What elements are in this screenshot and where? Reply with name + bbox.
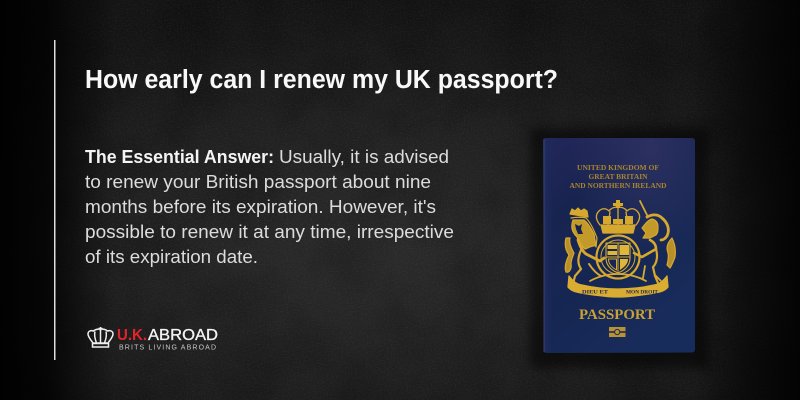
logo: U.K. Abroad	[88, 327, 218, 352]
passport cover	[543, 138, 695, 353]
lion	[565, 208, 604, 284]
motto text	[582, 290, 659, 296]
shield and garter	[596, 236, 640, 278]
crown	[596, 200, 640, 233]
passport heading	[570, 164, 666, 190]
vertical accent line	[54, 40, 56, 360]
passport heading: GREAT BRITAIN	[588, 173, 648, 181]
body text: essential answer: months before its expiration. However, it's	[85, 197, 436, 217]
passport heading: UNITED KINGDOM OF	[577, 164, 659, 172]
logo: U.K. Abroad: ABROAD	[148, 327, 218, 344]
icon: royal coat of arms	[565, 200, 675, 297]
body text: essential answer: Usually, it is advised	[279, 147, 449, 167]
body text: essential answer: The Essential Answer:	[85, 147, 274, 167]
logo: U.K. Abroad: BRITS LIVING ABROAD	[119, 344, 216, 352]
body text: essential answer	[85, 147, 454, 267]
body text: essential answer: of its expiration date.	[85, 247, 258, 267]
passport	[543, 138, 695, 353]
motto text: DIEU ET	[582, 290, 609, 296]
motto text: MON DROIT	[626, 290, 659, 296]
passport heading: AND NORTHERN IRELAND	[570, 182, 666, 190]
logo: U.K. Abroad: U.K.	[117, 327, 147, 344]
title: How early can I renew my UK passport?	[85, 66, 558, 94]
icon: crown	[88, 327, 113, 347]
body text: essential answer: to renew your British passport about nine	[85, 172, 431, 192]
passport label: PASSPORT	[579, 307, 655, 323]
motto ribbon	[568, 274, 668, 297]
icon: biometric chip symbol	[609, 327, 626, 337]
unicorn	[634, 201, 675, 283]
body text: essential answer: possible to renew it at any time, irrespective	[85, 222, 454, 242]
